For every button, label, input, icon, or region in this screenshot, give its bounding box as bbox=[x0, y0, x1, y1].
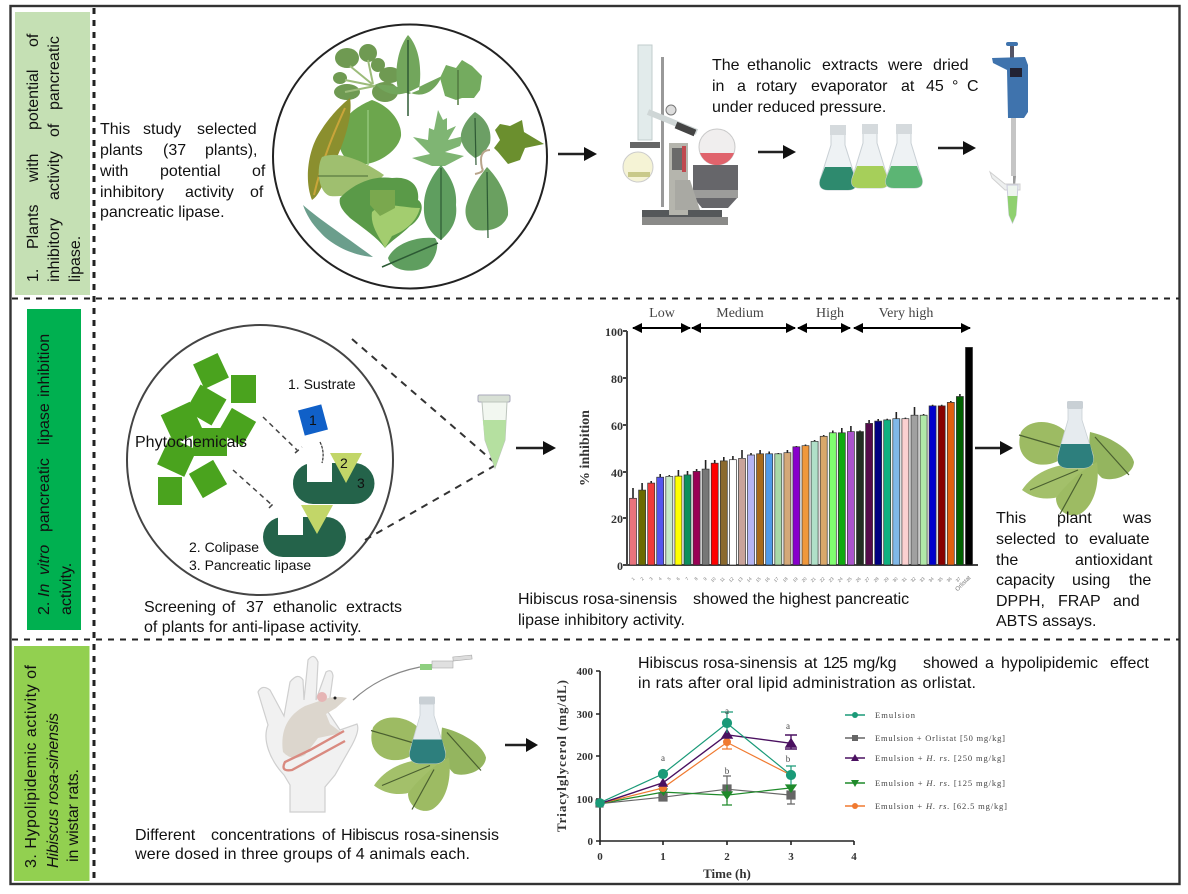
hand bbox=[258, 656, 358, 812]
text block: screening: extracts bbox=[346, 599, 402, 616]
bar chart: % inhibition bbox=[578, 306, 978, 593]
lettuce bbox=[340, 177, 422, 248]
y tick labels: 40 bbox=[611, 466, 623, 480]
rat body bbox=[282, 697, 347, 758]
heading: hypolipidemic activity bbox=[23, 664, 82, 868]
text block: antioxidant assays: ABTS assays. bbox=[996, 613, 1096, 630]
icon: substrate square: 1 bbox=[309, 412, 317, 428]
arrow: flasks to pipette bbox=[938, 141, 976, 155]
x tick labels: 9 bbox=[702, 576, 708, 581]
text block: hypolipidemic effect: mg/kg bbox=[853, 655, 897, 672]
icon: circle of plant leaves bbox=[273, 24, 547, 288]
lobed leaf bbox=[440, 60, 482, 100]
x tick labels: 28 bbox=[873, 576, 880, 583]
category labels bbox=[649, 306, 933, 321]
text block: hypolipidemic effect: rosa-sinensis bbox=[703, 655, 797, 672]
callout: enzyme inhibition circle bbox=[127, 325, 393, 595]
text block: study selection: plants bbox=[100, 142, 143, 159]
legend: Emulsion + H. rs. [62.5 mg/kg] bbox=[875, 801, 1007, 811]
flask 3 bbox=[886, 124, 922, 188]
text block: hypolipidemic effect: at bbox=[804, 655, 818, 672]
text block: rotary evaporator: rotary bbox=[756, 78, 797, 95]
significance letters: a bbox=[661, 753, 665, 763]
text block: dosing groups: Different bbox=[135, 827, 196, 844]
axis titles: Triacylglycerol (mg/dL) bbox=[554, 680, 569, 832]
text block: antioxidant assays: the bbox=[1129, 572, 1151, 589]
text block: screening: Screening bbox=[144, 599, 216, 616]
heading: hypolipidemic activity: in wistar rats. bbox=[65, 769, 82, 862]
tick labels: 200 bbox=[576, 751, 594, 763]
text block: rotary evaporator: under reduced pressure. bbox=[712, 99, 886, 116]
error bars bbox=[633, 394, 960, 498]
panel: section 2 label bbox=[27, 309, 81, 630]
big round leaf bbox=[338, 100, 401, 165]
axes bbox=[596, 671, 854, 845]
y tick labels: 100 bbox=[605, 325, 623, 339]
syringe bbox=[353, 667, 420, 700]
text block: rotary evaporator: were bbox=[887, 57, 923, 74]
text block: hypolipidemic effect: hypolipidemic bbox=[1001, 655, 1098, 672]
text block: rotary evaporator: 45 bbox=[926, 78, 944, 95]
icon: microtube bbox=[478, 395, 510, 468]
category labels: Medium bbox=[716, 306, 764, 321]
pinnate leaf lower bbox=[424, 165, 456, 240]
inhibition lines bbox=[233, 417, 302, 508]
text block: hypolipidemic effect: a bbox=[985, 655, 994, 672]
icon: selected plant with flask bbox=[1019, 401, 1134, 515]
x tick labels: 25 bbox=[846, 576, 853, 583]
text block: study selection: of bbox=[252, 163, 266, 180]
x tick labels: 36 bbox=[946, 576, 953, 583]
text block: dosing groups: concentrations bbox=[211, 827, 315, 844]
x tick labels: 5 bbox=[666, 576, 672, 581]
line chart: triacylglycerol over time: 3 bbox=[788, 851, 794, 863]
x tick labels: 34 bbox=[928, 576, 935, 583]
x tick labels: 27 bbox=[864, 576, 871, 583]
x tick labels: 18 bbox=[782, 576, 789, 583]
significance letters bbox=[661, 706, 791, 776]
x tick labels: 12 bbox=[728, 576, 735, 583]
x tick labels: 14 bbox=[746, 576, 753, 583]
arrow: tube to bar chart bbox=[516, 441, 556, 455]
x tick labels: 2 bbox=[639, 576, 645, 581]
text block: antioxidant assays: the bbox=[996, 552, 1018, 569]
x tick labels: 20 bbox=[801, 576, 808, 583]
label: colipase and lipase: 3. Pancreatic lipase bbox=[189, 557, 311, 573]
text block: study selection: of bbox=[250, 184, 264, 201]
text block: study selection: with bbox=[99, 163, 128, 180]
tick labels bbox=[576, 666, 594, 848]
significance letters: a bbox=[786, 721, 790, 731]
heading: plants with potential: lipase. bbox=[67, 236, 84, 282]
y tick labels: 20 bbox=[611, 512, 623, 526]
text block: antioxidant assays: antioxidant bbox=[1075, 552, 1153, 569]
series: 125 mg/kg bbox=[600, 785, 796, 805]
flask 2 bbox=[852, 124, 888, 188]
heading: in vitro inhibition: pancreatic bbox=[36, 458, 53, 532]
arrow: leaves to evaporator bbox=[558, 147, 597, 161]
text block: study selection: potential bbox=[160, 163, 220, 180]
category labels: Very high bbox=[879, 306, 933, 321]
line chart: triacylglycerol over time: 0 bbox=[597, 851, 603, 863]
text block: dosing groups: of bbox=[322, 827, 336, 844]
text block: antioxidant assays: capacity bbox=[996, 572, 1055, 589]
text block: dosing groups: rosa-sinensis bbox=[404, 827, 499, 844]
heading: plants with potential: pancreatic bbox=[46, 36, 63, 110]
x tick labels: 11 bbox=[719, 576, 726, 583]
heading: plants with potential: of bbox=[46, 123, 63, 137]
x tick labels: 32 bbox=[910, 576, 917, 583]
text block: hypolipidemic effect: effect bbox=[1110, 655, 1149, 672]
text block: hypolipidemic effect: Hibiscus bbox=[638, 655, 698, 672]
text block: study selection: study bbox=[143, 121, 181, 138]
icon: phytochemical squares bbox=[157, 353, 256, 505]
cordate leaf bbox=[319, 155, 384, 196]
y tick labels: 80 bbox=[611, 372, 623, 386]
leaf cluster bbox=[333, 44, 401, 102]
heading: hypolipidemic activity: Hibiscus rosa-sinensis bbox=[45, 713, 62, 868]
tick labels: 0 bbox=[588, 836, 594, 848]
heading: plants with potential: Plants bbox=[25, 205, 42, 249]
arrow: treatment to chart bbox=[505, 738, 538, 752]
text block: study selection: This bbox=[100, 121, 130, 138]
icon: lipase with colipase, active bbox=[293, 450, 374, 504]
text block: rotary evaporator: C bbox=[967, 78, 979, 95]
heading: plants with potential: 1. bbox=[25, 269, 42, 282]
line chart: triacylglycerol over time: 1 bbox=[660, 851, 666, 863]
text block: antioxidant assays: was bbox=[1122, 510, 1151, 527]
text block: screening: ethanolic bbox=[273, 599, 337, 616]
text block: antioxidant assays: evaluate bbox=[1089, 531, 1150, 548]
line chart: triacylglycerol over time: 4 bbox=[851, 851, 857, 863]
series: orlistat bbox=[596, 776, 795, 807]
maple leaf bbox=[494, 120, 544, 164]
x tick labels: 26 bbox=[855, 576, 862, 583]
x tick labels: 6 bbox=[675, 576, 681, 581]
x tick labels: 13 bbox=[737, 576, 744, 583]
text block: bar chart caption: showed the highest pancreatic bbox=[693, 591, 909, 608]
text block: antioxidant assays: FRAP bbox=[1058, 593, 1100, 610]
rat tail bbox=[284, 731, 345, 770]
text block: study selection: (37 bbox=[163, 142, 186, 159]
x tick labels: 37 bbox=[955, 576, 962, 583]
significance letters: b bbox=[786, 754, 791, 764]
text block: rotary evaporator: a bbox=[737, 78, 746, 95]
series: emulsion bbox=[596, 712, 796, 807]
text block: screening: of plants for anti-lipase activity. bbox=[144, 619, 362, 636]
text block: rotary evaporator: evaporator bbox=[811, 78, 888, 95]
x tick labels: 15 bbox=[755, 576, 762, 583]
heading: in vitro inhibition: In bbox=[36, 584, 53, 597]
zoom lines to tube bbox=[352, 339, 494, 540]
tick labels: 300 bbox=[576, 709, 594, 721]
x tick labels: 30 bbox=[892, 576, 899, 583]
flask 1 bbox=[820, 125, 856, 190]
pinnate leaf upper bbox=[412, 110, 464, 166]
line chart: triacylglycerol over time: Time (h) bbox=[703, 866, 751, 881]
bars bbox=[630, 347, 972, 565]
y axis title: % inhibition bbox=[578, 410, 593, 486]
heading: in vitro inhibition: lipase bbox=[36, 403, 53, 445]
text block: study selection: activity bbox=[185, 184, 234, 201]
series: 250 mg/kg bbox=[600, 730, 797, 804]
x tick labels: 33 bbox=[919, 576, 926, 583]
text block: rotary evaporator: ethanolic bbox=[747, 57, 811, 74]
x tick labels: 10 bbox=[710, 576, 717, 583]
x tick labels: 3 bbox=[648, 576, 654, 581]
heading: hypolipidemic activity: 3. Hypolipidemic activity of bbox=[23, 664, 40, 868]
icon: lipase with colipase, active: 2 bbox=[340, 455, 348, 471]
text block: rotary evaporator: ° bbox=[952, 78, 958, 95]
x tick labels bbox=[630, 575, 973, 593]
text block: antioxidant assays: and bbox=[1113, 593, 1140, 610]
x tick labels: 35 bbox=[937, 576, 944, 583]
x tick labels: 19 bbox=[792, 576, 799, 583]
heading: plants with potential: activity bbox=[46, 151, 63, 200]
legend: Emulsion + Orlistat [50 mg/kg] bbox=[875, 733, 1005, 743]
text block: bar chart caption: lipase inhibitory activity. bbox=[518, 612, 685, 629]
text block: study selection: pancreatic lipase. bbox=[100, 204, 225, 221]
icon: rotary evaporator bbox=[623, 45, 738, 225]
legend: Emulsion bbox=[875, 710, 916, 720]
icon: lipase with colipase, active: 3 bbox=[357, 475, 365, 491]
category labels: Low bbox=[649, 306, 676, 321]
tick labels: 100 bbox=[576, 794, 594, 806]
axes bbox=[623, 331, 978, 565]
icon: three extract flasks bbox=[820, 124, 922, 190]
text block: antioxidant assays: plant bbox=[1057, 510, 1092, 527]
text block: study selection: inhibitory bbox=[100, 184, 164, 201]
text block: dosing groups: Hibiscus bbox=[341, 827, 399, 844]
nettle leaf bbox=[465, 167, 508, 230]
text block: antioxidant assays: DPPH, bbox=[996, 593, 1045, 610]
x tick labels: 24 bbox=[837, 576, 844, 583]
panel: section 1 label bbox=[15, 12, 90, 295]
arrow: substrate to active site bbox=[320, 442, 323, 463]
heading: in vitro inhibition: inhibition bbox=[36, 334, 53, 397]
text block: antioxidant assays: using bbox=[1072, 572, 1110, 589]
text block: screening: of bbox=[222, 599, 236, 616]
y tick labels bbox=[605, 325, 623, 573]
bottom leaf bbox=[388, 238, 437, 271]
label: phytochemicals: Phytochemicals bbox=[135, 434, 247, 451]
x tick labels: Orlistat bbox=[955, 575, 973, 593]
heading: in vitro inhibition: activity. bbox=[58, 563, 75, 615]
x tick labels: 7 bbox=[684, 576, 690, 581]
icon: rat in hand with gavage bbox=[258, 655, 472, 812]
text block: rotary evaporator: The bbox=[712, 57, 740, 74]
olive long leaf bbox=[308, 98, 351, 200]
arrow: evaporator to flasks bbox=[758, 145, 796, 159]
x tick labels: 16 bbox=[764, 576, 771, 583]
text block: study selection: selected bbox=[197, 121, 257, 138]
text block: antioxidant assays: selected bbox=[996, 531, 1056, 548]
text block: antioxidant assays: This bbox=[996, 510, 1026, 527]
x tick labels: 23 bbox=[828, 576, 835, 583]
x tick labels: 21 bbox=[810, 576, 817, 583]
text block: screening: 37 bbox=[246, 599, 264, 616]
text block: antioxidant assays: to bbox=[1065, 531, 1078, 548]
text block: rotary evaporator: extracts bbox=[822, 57, 878, 74]
significance letters: a bbox=[725, 706, 729, 716]
y tick labels: 0 bbox=[617, 559, 623, 573]
blue-green narrow leaf bbox=[303, 205, 373, 257]
series: 62.5 mg/kg bbox=[600, 733, 794, 804]
y tick labels: 60 bbox=[611, 419, 623, 433]
heading: plants with potential: with bbox=[25, 154, 42, 183]
icon: substrate square bbox=[298, 404, 328, 436]
line chart: triacylglycerol over time bbox=[554, 666, 1007, 881]
arrow: bar chart to selected plant bbox=[975, 441, 1013, 455]
tall leaf bbox=[375, 35, 442, 95]
text block: dosing groups: were dosed in three groups of 4 animals each. bbox=[134, 846, 470, 863]
category labels: High bbox=[816, 306, 844, 321]
text block: bar chart caption: Hibiscus rosa-sinensis bbox=[518, 591, 677, 608]
legend: Emulsion + H. rs. [125 mg/kg] bbox=[875, 778, 1005, 788]
label: substrate: 1. Sustrate bbox=[288, 376, 356, 392]
heading: plants with potential: potential bbox=[25, 70, 42, 130]
x tick labels: 22 bbox=[819, 576, 826, 583]
heading: in vitro inhibition: vitro bbox=[36, 545, 53, 575]
x tick labels: 8 bbox=[693, 576, 699, 581]
x tick labels: 1 bbox=[630, 576, 636, 581]
significance letters: b bbox=[725, 766, 730, 776]
text block: rotary evaporator: in bbox=[712, 78, 724, 95]
text block: rotary evaporator: at bbox=[901, 78, 915, 95]
x tick labels: 29 bbox=[883, 576, 890, 583]
x tick labels: 17 bbox=[773, 576, 780, 583]
panel: section 3 label bbox=[14, 646, 90, 881]
heading: in vitro inhibition: 2. bbox=[36, 602, 53, 615]
text block: hypolipidemic effect: 125 bbox=[823, 655, 848, 672]
icon: micropipette with tube bbox=[990, 42, 1028, 223]
text block: hypolipidemic effect: showed bbox=[923, 655, 978, 672]
heading: plants with potential: of bbox=[25, 33, 42, 47]
text block: hypolipidemic effect: in rats after oral lipid administration as orlistat. bbox=[638, 675, 976, 692]
heading: plants with potential: inhibitory bbox=[46, 218, 63, 282]
line chart: triacylglycerol over time: 2 bbox=[724, 851, 730, 863]
text block: rotary evaporator: dried bbox=[933, 57, 969, 74]
activity category arrows bbox=[633, 327, 970, 329]
small leaf bbox=[461, 112, 490, 158]
legend: Emulsion + H. rs. [250 mg/kg] bbox=[875, 753, 1005, 763]
x tick labels: 4 bbox=[657, 576, 663, 581]
text block: study selection: plants), bbox=[205, 142, 257, 159]
legend bbox=[845, 710, 1007, 811]
label: colipase and lipase: 2. Colipase bbox=[189, 539, 259, 555]
tick labels: 400 bbox=[576, 666, 594, 678]
icon: lipase with colipase, inhibited bbox=[263, 505, 346, 557]
x tick labels: 31 bbox=[901, 576, 908, 583]
icon: plant with flask (section 3) bbox=[371, 696, 486, 811]
